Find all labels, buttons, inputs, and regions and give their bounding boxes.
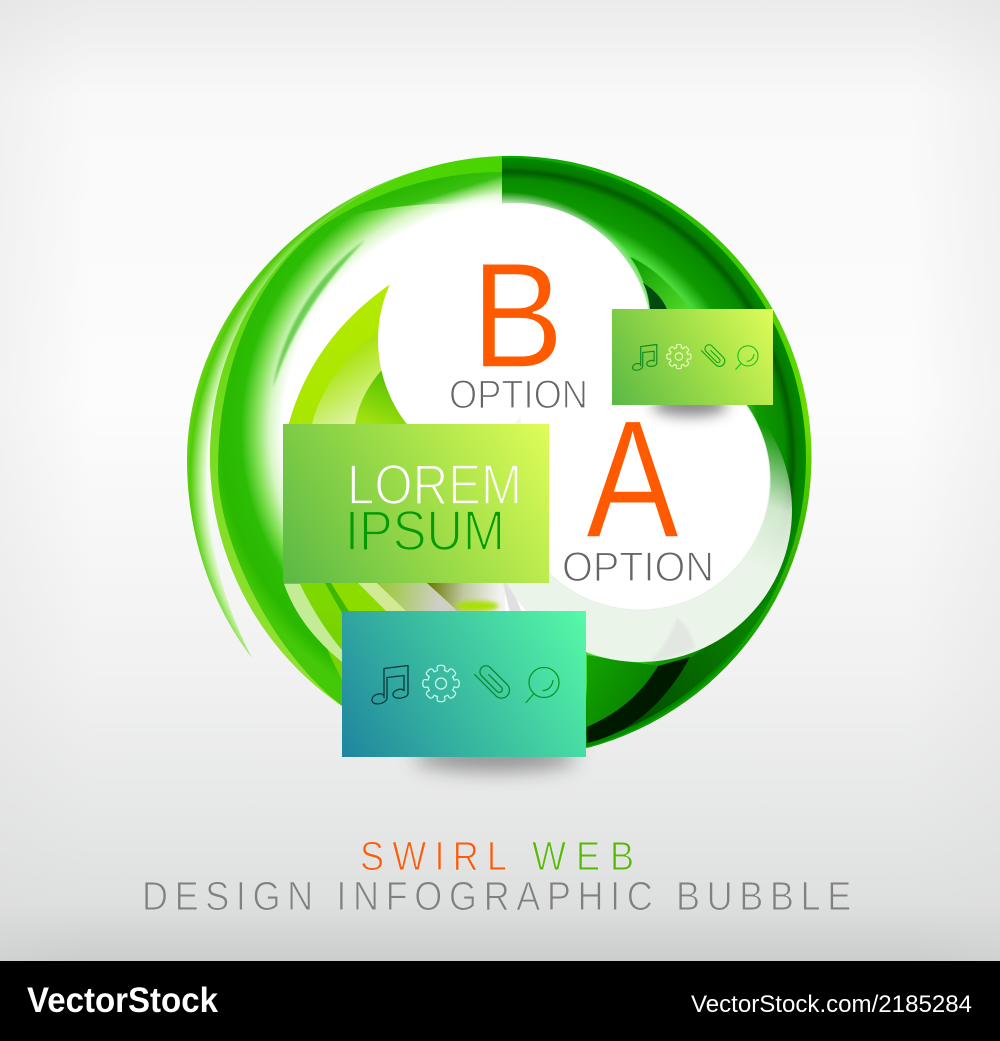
lower right dark band [587, 604, 768, 742]
icon: music [633, 344, 657, 370]
lower pale swirl [284, 584, 342, 662]
word OPTION: OPTION [562, 543, 714, 590]
icon: paperclip [475, 663, 513, 701]
inner green swirl [355, 370, 450, 424]
word WEB: WEB [532, 834, 634, 880]
swirl bubble [187, 156, 812, 758]
letter A: A [586, 385, 679, 573]
gray wedge [503, 583, 521, 611]
base green [284, 583, 310, 603]
lower green band [587, 655, 658, 727]
white right side [505, 592, 526, 611]
word SWIRL: SWIRL [360, 834, 507, 880]
shadow: teal card [413, 743, 577, 771]
panel: lorem ipsum card [283, 424, 549, 583]
panel: small green card [612, 309, 773, 405]
pale inner swirl [312, 328, 450, 424]
footer url: VectorStock.com/2185284 [691, 991, 972, 1018]
right dark green bands [502, 158, 806, 747]
shadow: small card [652, 394, 728, 416]
top fold [328, 172, 502, 222]
footer logo: VectorStock [27, 981, 219, 1020]
pale yellow wedge [358, 583, 406, 611]
subtitle: DESIGN INFOGRAPHIC BUBBLE [142, 874, 851, 920]
olive gray wedge [377, 583, 460, 613]
heading: IPSUM: IPSUM [345, 499, 505, 563]
icon: gear [667, 344, 691, 369]
letter B: B [471, 231, 564, 399]
left half light rim [210, 156, 502, 706]
label: option A [562, 385, 714, 590]
label: option B [449, 231, 588, 417]
panel: teal card [342, 611, 586, 757]
bubble A inner [510, 350, 770, 610]
bubble A gray swirl [650, 617, 695, 661]
bubble B [378, 203, 652, 477]
dark olive fade [427, 583, 505, 613]
right half bright rim [502, 156, 812, 748]
left half main band [218, 172, 502, 706]
large icons [372, 663, 559, 704]
icon: paperclip [701, 343, 727, 369]
upper right dark crescent [643, 283, 668, 312]
icon: magnifier [736, 346, 758, 369]
dark spike [273, 240, 365, 388]
bubble A outer ring [488, 358, 792, 662]
yellow green swirl [284, 283, 560, 680]
white glow behind option B [347, 192, 663, 508]
bright yellow green highlight [455, 601, 499, 611]
small icons [633, 343, 758, 370]
light green wedge [331, 583, 386, 611]
icon: gear [423, 665, 459, 702]
word OPTION: OPTION [449, 373, 588, 417]
thin green line [325, 583, 350, 613]
white merge between bubbles [520, 290, 640, 510]
footer bar [0, 961, 1000, 1041]
icon: music [372, 666, 408, 704]
icon: magnifier [526, 668, 559, 702]
upper right green crescent [630, 257, 692, 312]
title: swirl web [360, 834, 634, 880]
thin outer left swirl [187, 157, 510, 658]
lower swirl strip [284, 583, 526, 613]
heading: LOREM: LOREM [347, 453, 522, 517]
lower black wedge [587, 657, 690, 743]
